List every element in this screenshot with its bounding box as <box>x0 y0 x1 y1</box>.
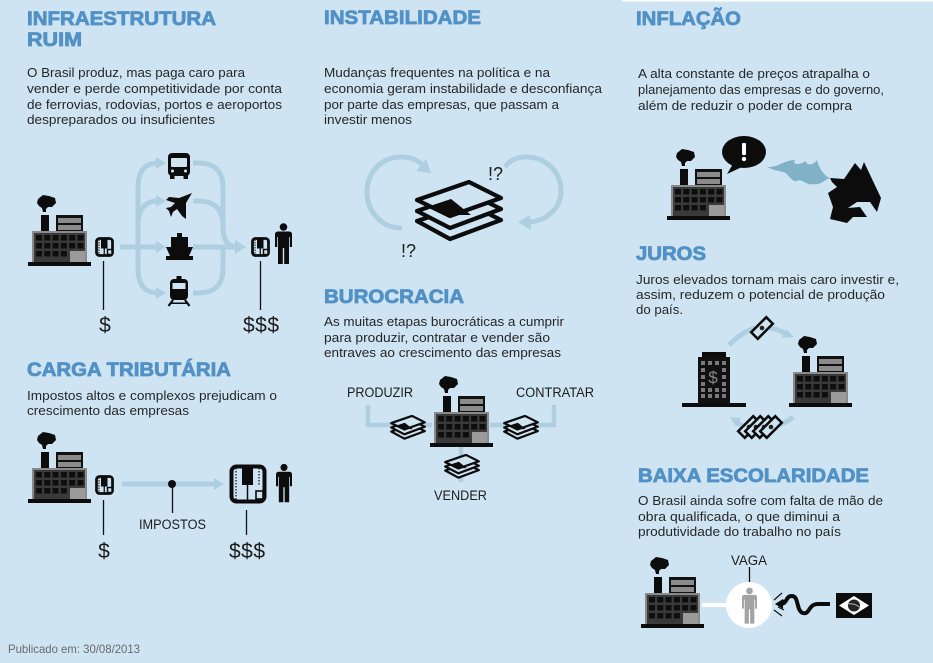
icon: documents bottom <box>445 455 479 478</box>
vacancy line <box>748 567 750 582</box>
cost line: low <box>102 261 104 310</box>
text block: inflação: além de reduzir o poder de compra <box>638 98 853 113</box>
text block: instabilidade: por parte das empresas, que passam a <box>324 97 560 112</box>
heading: burocracia: BUROCRACIA <box>324 286 464 308</box>
heading: carga tributária: CARGA TRIBUTÁRIA <box>27 358 231 381</box>
icon: person <box>275 223 292 264</box>
text block: infraestrutura <box>27 65 283 127</box>
text block: infraestrutura: despreparados ou insuficientes <box>27 112 216 127</box>
text block: burocracia: para produzir, contratar e vender são <box>324 330 550 345</box>
text block: infraestrutura: de ferrovias, rodovias, portos e aeroportos <box>27 97 283 112</box>
icon: documents right <box>504 416 538 439</box>
text block: baixa escolaridade: obra qualificada, o que diminui a <box>638 509 841 524</box>
icon: train <box>168 276 190 306</box>
icon: small box destination <box>252 238 268 256</box>
panel: burocracia <box>324 286 594 503</box>
text block: instabilidade: investir menos <box>324 112 413 127</box>
top edge strip <box>622 0 933 2</box>
cost line: low <box>102 500 104 535</box>
icon: small box <box>96 476 112 494</box>
label: $: $ <box>99 314 111 337</box>
text block: juros: do país. <box>636 302 683 317</box>
icon: factory <box>667 149 730 220</box>
label: !? left: !? <box>401 241 416 261</box>
text block: inflação <box>638 66 884 113</box>
icon: banknotes pile <box>738 416 782 438</box>
text block: baixa escolaridade: produtividade do trabalho no país <box>638 524 842 539</box>
text block: infraestrutura: O Brasil produz, mas paga caro para <box>27 65 246 80</box>
heading: baixa escolaridade: BAIXA ESCOLARIDADE <box>638 465 869 487</box>
icon: bank building: $ <box>708 368 718 387</box>
panel: carga tributária <box>27 358 292 563</box>
icon: brazil flag <box>836 593 872 618</box>
icon: bus <box>168 153 190 179</box>
icon: person <box>276 464 292 502</box>
heading: infraestrutura ruim: INFRAESTRUTURA <box>27 8 216 30</box>
panel: instabilidade <box>324 7 603 261</box>
icon: empty position person <box>742 588 757 624</box>
icon: factory <box>28 432 91 503</box>
speech bubble <box>722 136 766 174</box>
icon: ship <box>166 233 193 260</box>
label: impostos: IMPOSTOS <box>139 517 206 532</box>
arrow: wavy <box>775 596 830 613</box>
label: vender: VENDER <box>434 488 487 503</box>
heading: infraestrutura ruim: RUIM <box>27 29 82 51</box>
icon: factory <box>641 557 704 628</box>
text block: inflação: A alta constante de preços atrapalha o <box>638 66 870 81</box>
text block: burocracia: entraves ao crescimento das empresas <box>324 345 562 360</box>
label: produzir: PRODUZIR <box>347 385 413 400</box>
text block: carga tributária: crescimento das empresas <box>27 403 190 418</box>
icon: factory <box>28 195 91 266</box>
label: $: $ <box>98 540 110 563</box>
text block: carga tributária: Impostos altos e complexos prejudicam o <box>27 388 277 403</box>
spark marks <box>774 593 784 616</box>
text block: carga tributária <box>27 388 277 418</box>
tax marker <box>168 480 176 513</box>
label: contratar: CONTRATAR <box>516 385 594 400</box>
icon: factory <box>430 376 493 447</box>
heading: juros: JUROS <box>636 243 706 265</box>
text block: instabilidade <box>324 65 603 127</box>
text block: baixa escolaridade <box>638 493 883 539</box>
vacancy circle <box>726 582 772 628</box>
text block: juros: assim, reduzem o potencial de produção <box>636 287 885 302</box>
connectors <box>368 405 554 482</box>
cost line: high <box>260 261 262 310</box>
text block: baixa escolaridade: O Brasil ainda sofre com falta de mão de <box>638 493 883 508</box>
icon: documents stack <box>417 182 501 239</box>
label: $$$: $$$ <box>243 314 279 337</box>
arrow: bottom cycle <box>730 417 793 427</box>
icon: banknote <box>751 317 773 339</box>
panel: juros <box>636 243 899 438</box>
text block: instabilidade: Mudanças frequentes na política e na <box>324 65 551 80</box>
publication date: Publicado em: 30/08/2013 <box>8 642 140 656</box>
arrow: right cycle <box>505 157 561 230</box>
text block: juros <box>636 272 899 317</box>
text block: inflação: planejamento das empresas e do governo, <box>638 82 884 97</box>
arrow: left cycle <box>367 157 431 228</box>
text block: infraestrutura: vender e perde competitividade por conta <box>27 81 283 96</box>
text block: burocracia <box>324 314 565 360</box>
icon: flame <box>767 160 830 184</box>
label: $$$: $$$ <box>229 540 265 563</box>
label: !? right: !? <box>488 164 503 184</box>
arrows: transport routes <box>120 157 246 299</box>
panel: baixa escolaridade <box>638 465 883 628</box>
text block: burocracia: As muitas etapas burocráticas a cumprir <box>324 314 565 329</box>
panel: inflação <box>636 7 884 223</box>
label: vaga: VAGA <box>731 553 767 568</box>
icon: plane <box>166 193 192 219</box>
heading: instabilidade: INSTABILIDADE <box>324 7 481 29</box>
icon: small box <box>96 238 112 256</box>
connector <box>702 603 732 607</box>
icon: dragon <box>828 162 881 223</box>
arrow: taxes <box>122 478 224 490</box>
icon: factory <box>789 336 852 407</box>
heading: inflação: INFLAÇÃO <box>636 7 741 30</box>
icon: bank building <box>682 352 746 407</box>
heading: infraestrutura ruim <box>27 8 216 51</box>
arrow: top cycle <box>729 328 794 345</box>
icon: documents left <box>391 416 425 439</box>
cost line: high <box>246 510 248 535</box>
icon: large box <box>232 466 264 502</box>
text block: instabilidade: economia geram instabilidade e desconfiança <box>324 81 603 96</box>
text block: juros: Juros elevados tornam mais caro investir e, <box>636 272 899 287</box>
panel: infraestrutura ruim <box>27 8 292 337</box>
